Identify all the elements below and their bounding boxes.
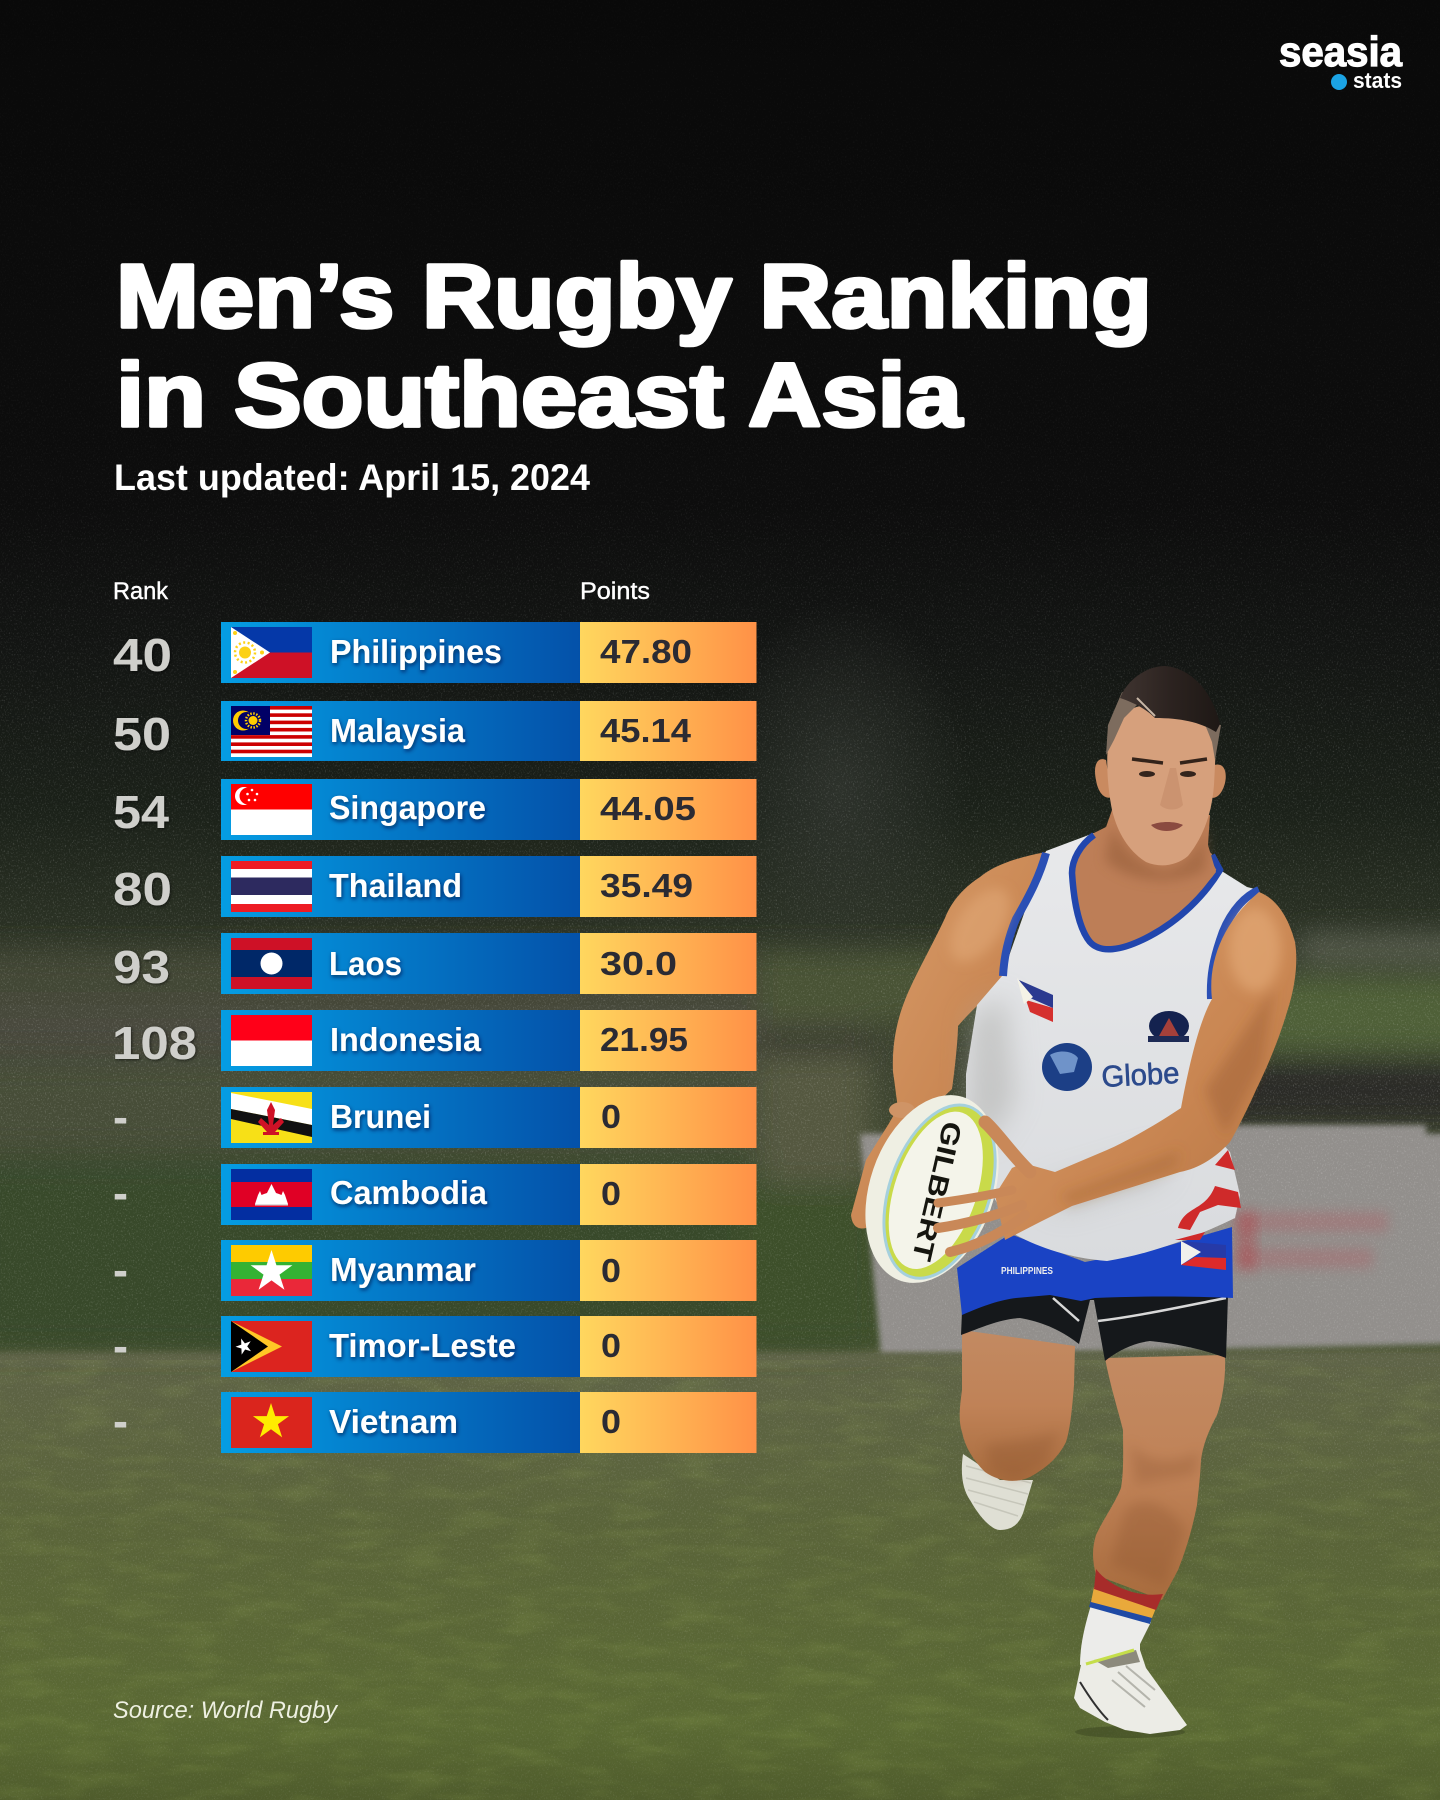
flag: Brunei [231,1092,312,1143]
player: arm highlight [938,878,1281,1205]
row: Malaysia: Malaysia [330,712,466,749]
row: Myanmar [113,1240,756,1301]
background: pitch-side sign [860,1125,1440,1355]
player: sock [1080,1569,1163,1665]
row: Laos: 30.0 [600,945,677,982]
row: Laos [113,933,756,994]
flag: Philippines [231,627,312,678]
row: Cambodia: 0 [601,1175,621,1212]
player: singlet [960,833,1259,1261]
row: Vietnam [113,1392,756,1453]
logo: seasia stats: seasia [1279,28,1403,75]
title: Men’s Rugby Ranking [116,247,1152,347]
row: Thailand: 80 [113,863,172,915]
player illustration [842,666,1296,1738]
row: Philippines [113,622,756,683]
player: left leg [960,1330,1075,1481]
flag: Laos [231,938,312,989]
player: shorts flag [1181,1241,1226,1270]
player: shorts text: PHILIPPINES [1001,1266,1053,1277]
icon: logo dot [1331,74,1347,90]
row: Singapore: Singapore [329,789,486,826]
player: singlet fold shading [968,995,1170,1210]
row: Vietnam: Vietnam [329,1403,458,1440]
player: neck shadow [1105,825,1208,880]
player: crest [1148,1011,1189,1042]
source note: Source: World Rugby [113,1697,339,1724]
row: Indonesia [112,1010,756,1071]
row: Myanmar: 0 [601,1252,621,1289]
row: Brunei: 0 [601,1098,621,1135]
row: Myanmar: - [113,1244,128,1296]
player: sponsor logo [1042,1043,1180,1094]
player: blue shorts [957,1227,1233,1315]
flag: Timor-Leste [231,1321,312,1372]
player: sponsor logo: Globe [1101,1057,1180,1094]
player: black undershorts [961,1280,1228,1361]
player: chest flag [1017,978,1053,1022]
background: grass texture [0,1360,1440,1800]
row: Brunei: - [113,1091,128,1143]
flag: Cambodia [231,1169,312,1220]
title [116,247,1152,446]
player: neck [1089,810,1216,942]
flag: Singapore [231,784,312,835]
player: far arm and hand [851,852,1046,1228]
ball body and seam bands [842,1077,1022,1301]
row: Myanmar: Myanmar [330,1251,476,1288]
row: Vietnam: 0 [601,1403,621,1440]
rugby ball [842,1077,1022,1301]
title: in Southeast Asia [116,346,963,446]
row: Laos: 93 [113,941,170,993]
player: mouth [1151,822,1183,831]
player: nose [1160,768,1183,810]
row: Singapore: 54 [113,786,169,838]
player: shaved sides [1106,692,1221,760]
row: Brunei [113,1087,756,1148]
player: back foot boot [962,1454,1033,1530]
row: Philippines: Philippines [330,633,502,670]
column header: points: Points [580,578,650,605]
player: collar trim [1072,835,1220,949]
flag: Malaysia [231,706,312,757]
player: fingers [938,1122,1030,1252]
flag: Vietnam [231,1397,312,1448]
row: Thailand: Thailand [329,867,462,904]
row: Malaysia: 50 [113,708,171,760]
logo: seasia stats: stats [1353,68,1402,93]
row: Singapore: 44.05 [600,790,696,827]
row: Malaysia [113,701,756,761]
row: Brunei: Brunei [330,1098,431,1135]
player: leg shading [985,1430,1200,1585]
player: right armhole trim [1211,890,1259,999]
row: Cambodia: Cambodia [330,1174,488,1211]
row: Thailand [113,856,756,917]
player: front boot [1074,1650,1187,1738]
player: hair [1120,666,1220,732]
background: blurred treeline and bushes [0,936,1440,1350]
player: left armhole trim [1003,853,1046,976]
flag: Indonesia [231,1015,312,1066]
row: Thailand: 35.49 [600,867,693,904]
row: Timor-Leste: Timor-Leste [329,1327,516,1364]
row: Philippines: 40 [113,629,172,681]
row: Indonesia: 108 [112,1017,197,1069]
background: misty haze behind player [710,600,970,980]
player: ears [1095,759,1226,798]
player: shirt dragon print [1175,1150,1241,1240]
player: chest skin [1071,825,1220,949]
flag: Myanmar [231,1245,312,1296]
player: eyes and brows [1132,759,1207,777]
row: Vietnam: - [113,1395,128,1447]
subtitle: last updated: Last updated: April 15, 2024 [114,457,590,498]
row: Timor-Leste: - [113,1320,128,1372]
ball brand text: GILBERT [906,1119,967,1264]
player: near arm and hand [938,878,1296,1252]
row: Cambodia [113,1164,756,1225]
row: Indonesia: Indonesia [330,1021,482,1058]
player: head [1089,666,1226,942]
row: Singapore [113,779,756,840]
player: right leg [1093,1355,1225,1600]
player: face [1107,705,1216,865]
row: Cambodia: - [113,1167,128,1219]
row: Malaysia: 45.14 [600,712,692,749]
row: Timor-Leste: 0 [601,1327,621,1364]
flag: Thailand [231,861,312,912]
row: Indonesia: 21.95 [600,1021,688,1058]
row: Philippines: 47.80 [600,633,692,670]
row: Laos: Laos [329,945,402,982]
row: Timor-Leste [113,1316,756,1377]
column header: rank: Rank [113,578,169,605]
ranking table [112,622,756,1453]
